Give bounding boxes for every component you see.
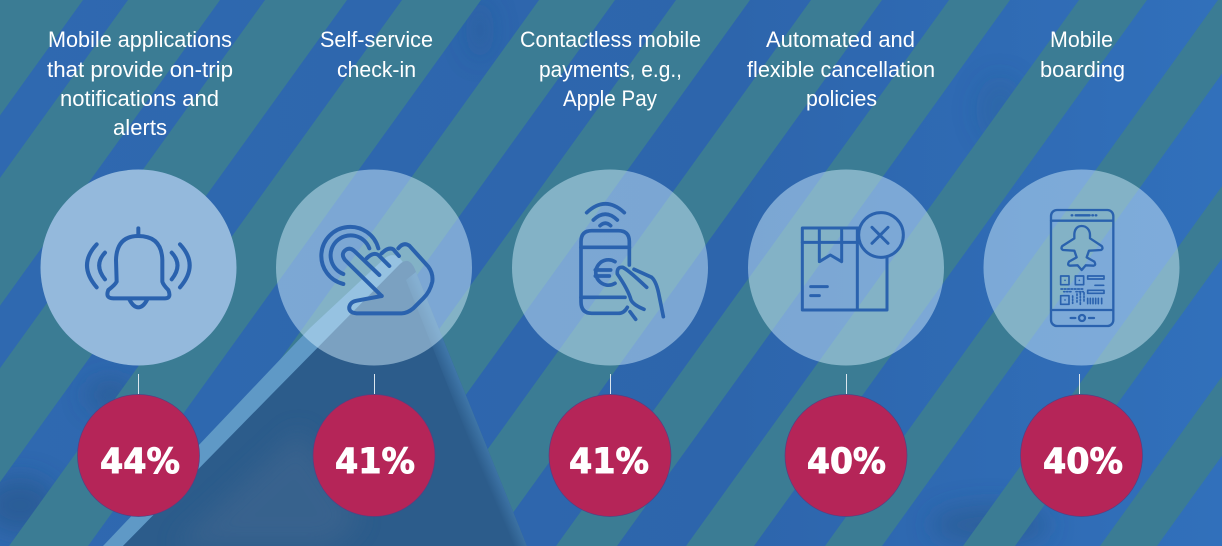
heading: mobile applications: that provide on-trip xyxy=(47,57,233,82)
icon: phone boarding pass xyxy=(1051,210,1113,326)
heading: automated cancellation: flexible cancellation xyxy=(747,57,935,82)
icon circle xyxy=(748,170,944,366)
heading: automated cancellation: policies xyxy=(806,86,877,111)
heading: self-service check-in xyxy=(320,27,433,82)
icon: cancelled parcel xyxy=(802,213,903,310)
column 3: contactless payments xyxy=(512,27,708,516)
heading: automated cancellation: Automated and xyxy=(766,27,915,52)
connector line xyxy=(374,374,375,394)
heading: self-service check-in: check-in xyxy=(337,57,416,82)
badge: 41%: 41% xyxy=(569,442,649,482)
column 2: self-service check-in xyxy=(276,27,472,516)
connector line xyxy=(138,374,139,394)
heading: contactless payments: Contactless mobile xyxy=(520,27,701,52)
heading: mobile boarding xyxy=(1040,27,1125,82)
badge: 40% xyxy=(1020,394,1142,516)
badge: 44% xyxy=(78,394,200,516)
column 1: mobile applications xyxy=(40,27,236,516)
badge: 40%: 40% xyxy=(807,442,886,482)
heading: contactless payments xyxy=(520,27,701,111)
connector line xyxy=(610,374,611,394)
badge: 41%: 41% xyxy=(335,442,415,482)
icon: ringing bell xyxy=(87,228,190,307)
icon circle xyxy=(276,170,472,366)
heading: mobile applications: Mobile applications xyxy=(48,27,232,52)
badge: 44%: 44% xyxy=(100,442,180,482)
heading: contactless payments: payments, e.g., xyxy=(539,57,682,82)
badge: 41% xyxy=(549,394,671,516)
heading: mobile boarding: Mobile xyxy=(1050,27,1113,52)
icon: phone payment xyxy=(581,204,663,319)
heading: mobile applications xyxy=(47,27,233,140)
heading: mobile applications: notifications and xyxy=(60,86,219,111)
connector line xyxy=(846,374,847,394)
heading: contactless payments: Apple Pay xyxy=(563,86,657,111)
connector line xyxy=(1079,374,1080,394)
icon circle xyxy=(984,170,1180,366)
heading: mobile applications: alerts xyxy=(113,115,167,140)
column 4: automated cancellation xyxy=(747,27,944,516)
column 5: mobile boarding xyxy=(984,27,1180,516)
heading: mobile boarding: boarding xyxy=(1040,57,1125,82)
heading: self-service check-in: Self-service xyxy=(320,27,433,52)
icon circle xyxy=(512,170,708,366)
badge: 40%: 40% xyxy=(1043,442,1123,482)
icon: hand touching xyxy=(321,227,432,313)
heading: automated cancellation xyxy=(747,27,935,111)
badge: 41% xyxy=(313,394,435,516)
icon circle xyxy=(40,170,236,366)
badge: 40% xyxy=(785,394,907,516)
